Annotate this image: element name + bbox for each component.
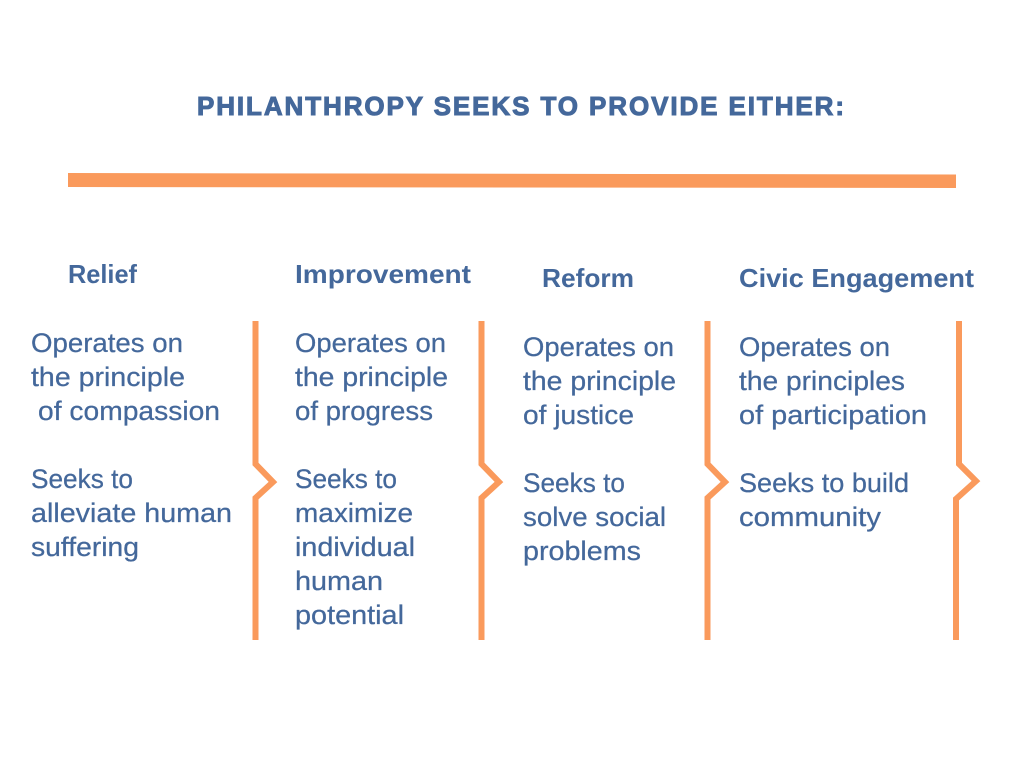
text block: Improvement principle: of progress [295,396,433,426]
text block: Improvement principle [295,328,448,426]
text block: Reform goal: Seeks to [523,468,625,498]
text block: Improvement goal: individual [295,532,415,562]
text block: Relief principle: Operates on [31,328,183,358]
text block: Reform goal: solve social [523,502,666,532]
text block: Civic Engagement goal: community [739,502,882,532]
text block: Relief goal [31,464,232,562]
arrow divider 1 [256,321,273,640]
title: PHILANTHROPY SEEKS TO PROVIDE EITHER: [197,91,844,121]
text block: Civic Engagement principle: of participation [739,400,927,430]
text block: Reform principle: the principle [523,366,676,396]
text block: Civic Engagement principle: Operates on [739,332,890,362]
column: Reform [523,263,676,566]
text block: Improvement principle: the principle [295,362,448,392]
column: Improvement [295,259,471,630]
arrow divider 2 [482,321,499,640]
arrow divider 4 [956,321,976,640]
text block: Relief goal: Seeks to [31,464,133,494]
text block: Relief goal: suffering [31,532,139,562]
text block: Reform principle [523,332,676,430]
arrow divider 3 [708,321,725,640]
column: Relief [31,259,232,562]
text block: Civic Engagement principle [739,332,927,430]
text block: Relief principle: the principle [31,362,185,392]
text block: Reform goal [523,468,666,566]
column: Civic Engagement [739,263,974,532]
heading: Improvement: Improvement [295,259,471,289]
text block: Reform goal: problems [523,536,641,566]
text block: Reform principle: of justice [523,400,634,430]
text block: Relief goal: alleviate human [31,498,232,528]
heading: Civic Engagement: Civic Engagement [739,263,974,293]
text block: Improvement goal [295,464,415,630]
text block: Reform principle: Operates on [523,332,674,362]
text block: Civic Engagement goal [739,468,909,532]
text block: Improvement goal: maximize [295,498,413,528]
text block: Civic Engagement principle: the principles [739,366,905,396]
text block: Improvement goal: human [295,566,383,596]
text block: Improvement goal: Seeks to [295,464,397,494]
heading: Reform: Reform [542,263,634,293]
text block: Improvement goal: potential [295,600,404,630]
text block: Relief principle [31,328,220,426]
text block: Civic Engagement goal: Seeks to build [739,468,909,498]
heading: Relief: Relief [68,259,137,289]
orange title rule [68,173,956,188]
text block: Improvement principle: Operates on [295,328,446,358]
text block: Relief principle: of compassion [38,396,220,426]
